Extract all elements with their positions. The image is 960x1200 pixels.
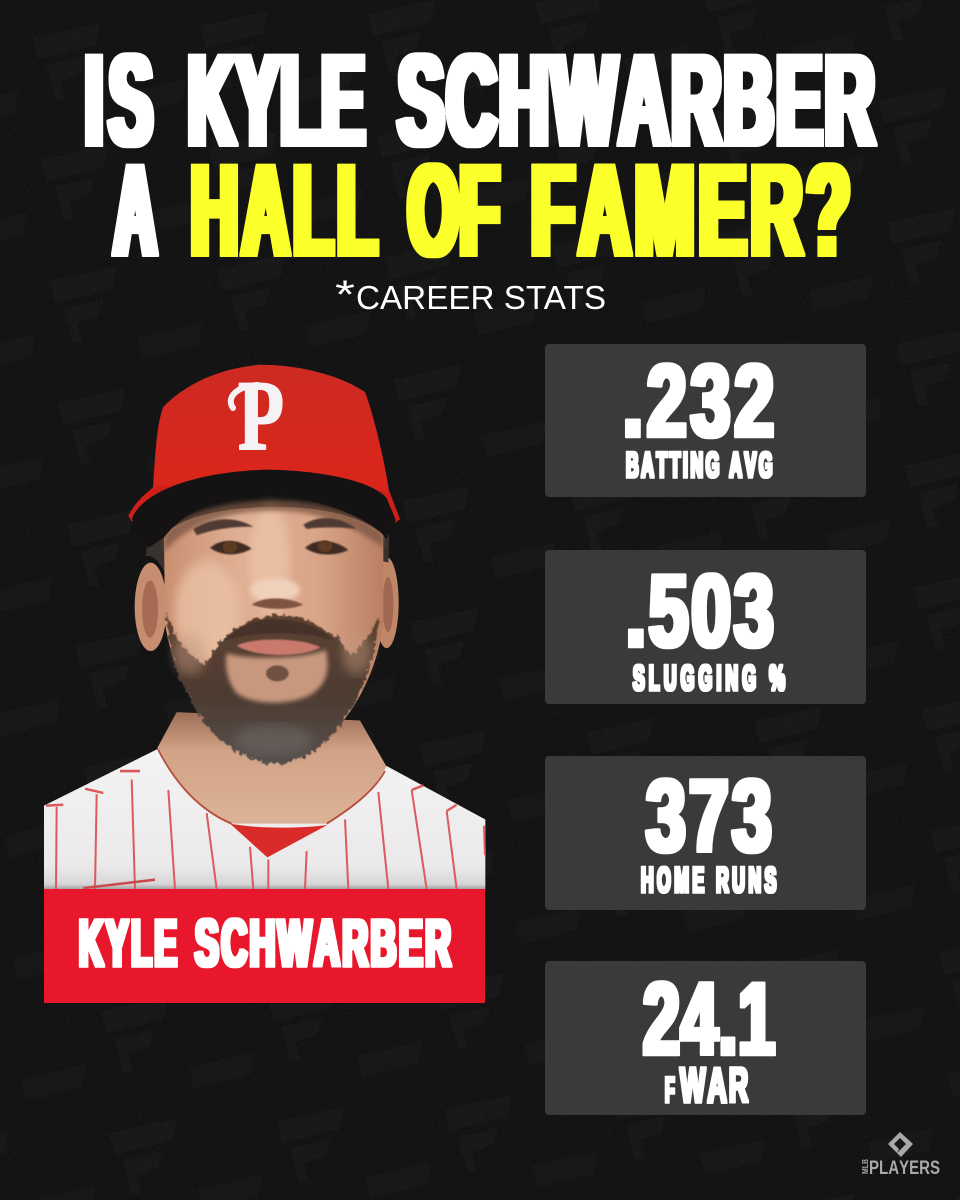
stat card: home runs: 373 bbox=[646, 758, 775, 873]
title line two: OF bbox=[408, 137, 500, 283]
title line two: A bbox=[114, 139, 156, 283]
cap crown bbox=[153, 365, 391, 504]
cap logo: P: P bbox=[238, 360, 284, 471]
title line one: KYLE bbox=[188, 27, 366, 173]
lips bbox=[237, 639, 321, 655]
side hair bbox=[146, 527, 389, 577]
stat card: fWAR: WAR bbox=[680, 1059, 750, 1113]
stat card: fWAR: 24.1 bbox=[643, 963, 776, 1077]
cap logo: P bbox=[231, 360, 284, 471]
stat card: home runs bbox=[545, 756, 866, 910]
soul patch bbox=[266, 665, 289, 681]
stat card: batting average: .232 bbox=[623, 343, 778, 458]
beard bbox=[166, 611, 379, 764]
player name: KYLE bbox=[79, 907, 180, 981]
chin bbox=[226, 650, 328, 703]
title line one bbox=[85, 27, 877, 174]
title line one: IS bbox=[85, 27, 158, 173]
face highlights and shadows bbox=[164, 500, 383, 662]
title bbox=[85, 27, 877, 284]
title line one: SCHWARBER bbox=[398, 29, 877, 174]
undershirt bbox=[230, 824, 327, 857]
subtitle: career stats: * bbox=[335, 273, 355, 317]
neck bbox=[157, 712, 387, 825]
title line two bbox=[114, 137, 855, 284]
player name bbox=[79, 906, 454, 981]
logo: MLB Players bbox=[861, 1132, 940, 1179]
face bbox=[164, 507, 383, 763]
player portrait bbox=[44, 360, 485, 891]
player name: SCHWARBER bbox=[195, 906, 454, 981]
logo: MLB Players: MLB bbox=[861, 1159, 870, 1174]
stat card: home runs: HOME RUNS bbox=[641, 860, 780, 900]
logo: MLB Players: PLAYERS bbox=[869, 1158, 940, 1179]
name banner bbox=[44, 889, 485, 1003]
cap brim underside bbox=[132, 470, 396, 548]
stat card: batting average: BATTING AVG bbox=[626, 445, 775, 485]
stat card: fWAR: F bbox=[665, 1070, 675, 1110]
stat card: slugging percentage bbox=[545, 550, 866, 704]
nose bbox=[250, 578, 303, 609]
subtitle: career stats: CAREER STATS bbox=[356, 279, 606, 316]
stat card: fWAR bbox=[545, 961, 866, 1115]
pinstripes bbox=[46, 750, 485, 889]
beard grey bbox=[233, 725, 313, 754]
stat card: batting average bbox=[545, 343, 866, 497]
cap brim edge bbox=[128, 486, 400, 523]
title line two: FAMER? bbox=[531, 139, 855, 284]
stat card: slugging percentage: .503 bbox=[626, 553, 777, 668]
brows bbox=[193, 518, 357, 535]
ears bbox=[135, 563, 167, 651]
title line two: HALL bbox=[191, 137, 381, 283]
jersey bbox=[44, 749, 485, 891]
mustache bbox=[224, 619, 333, 641]
stat card: slugging percentage: SLUGGING % bbox=[633, 658, 789, 698]
eyes bbox=[210, 540, 348, 555]
cheek stubble tint bbox=[173, 632, 372, 674]
